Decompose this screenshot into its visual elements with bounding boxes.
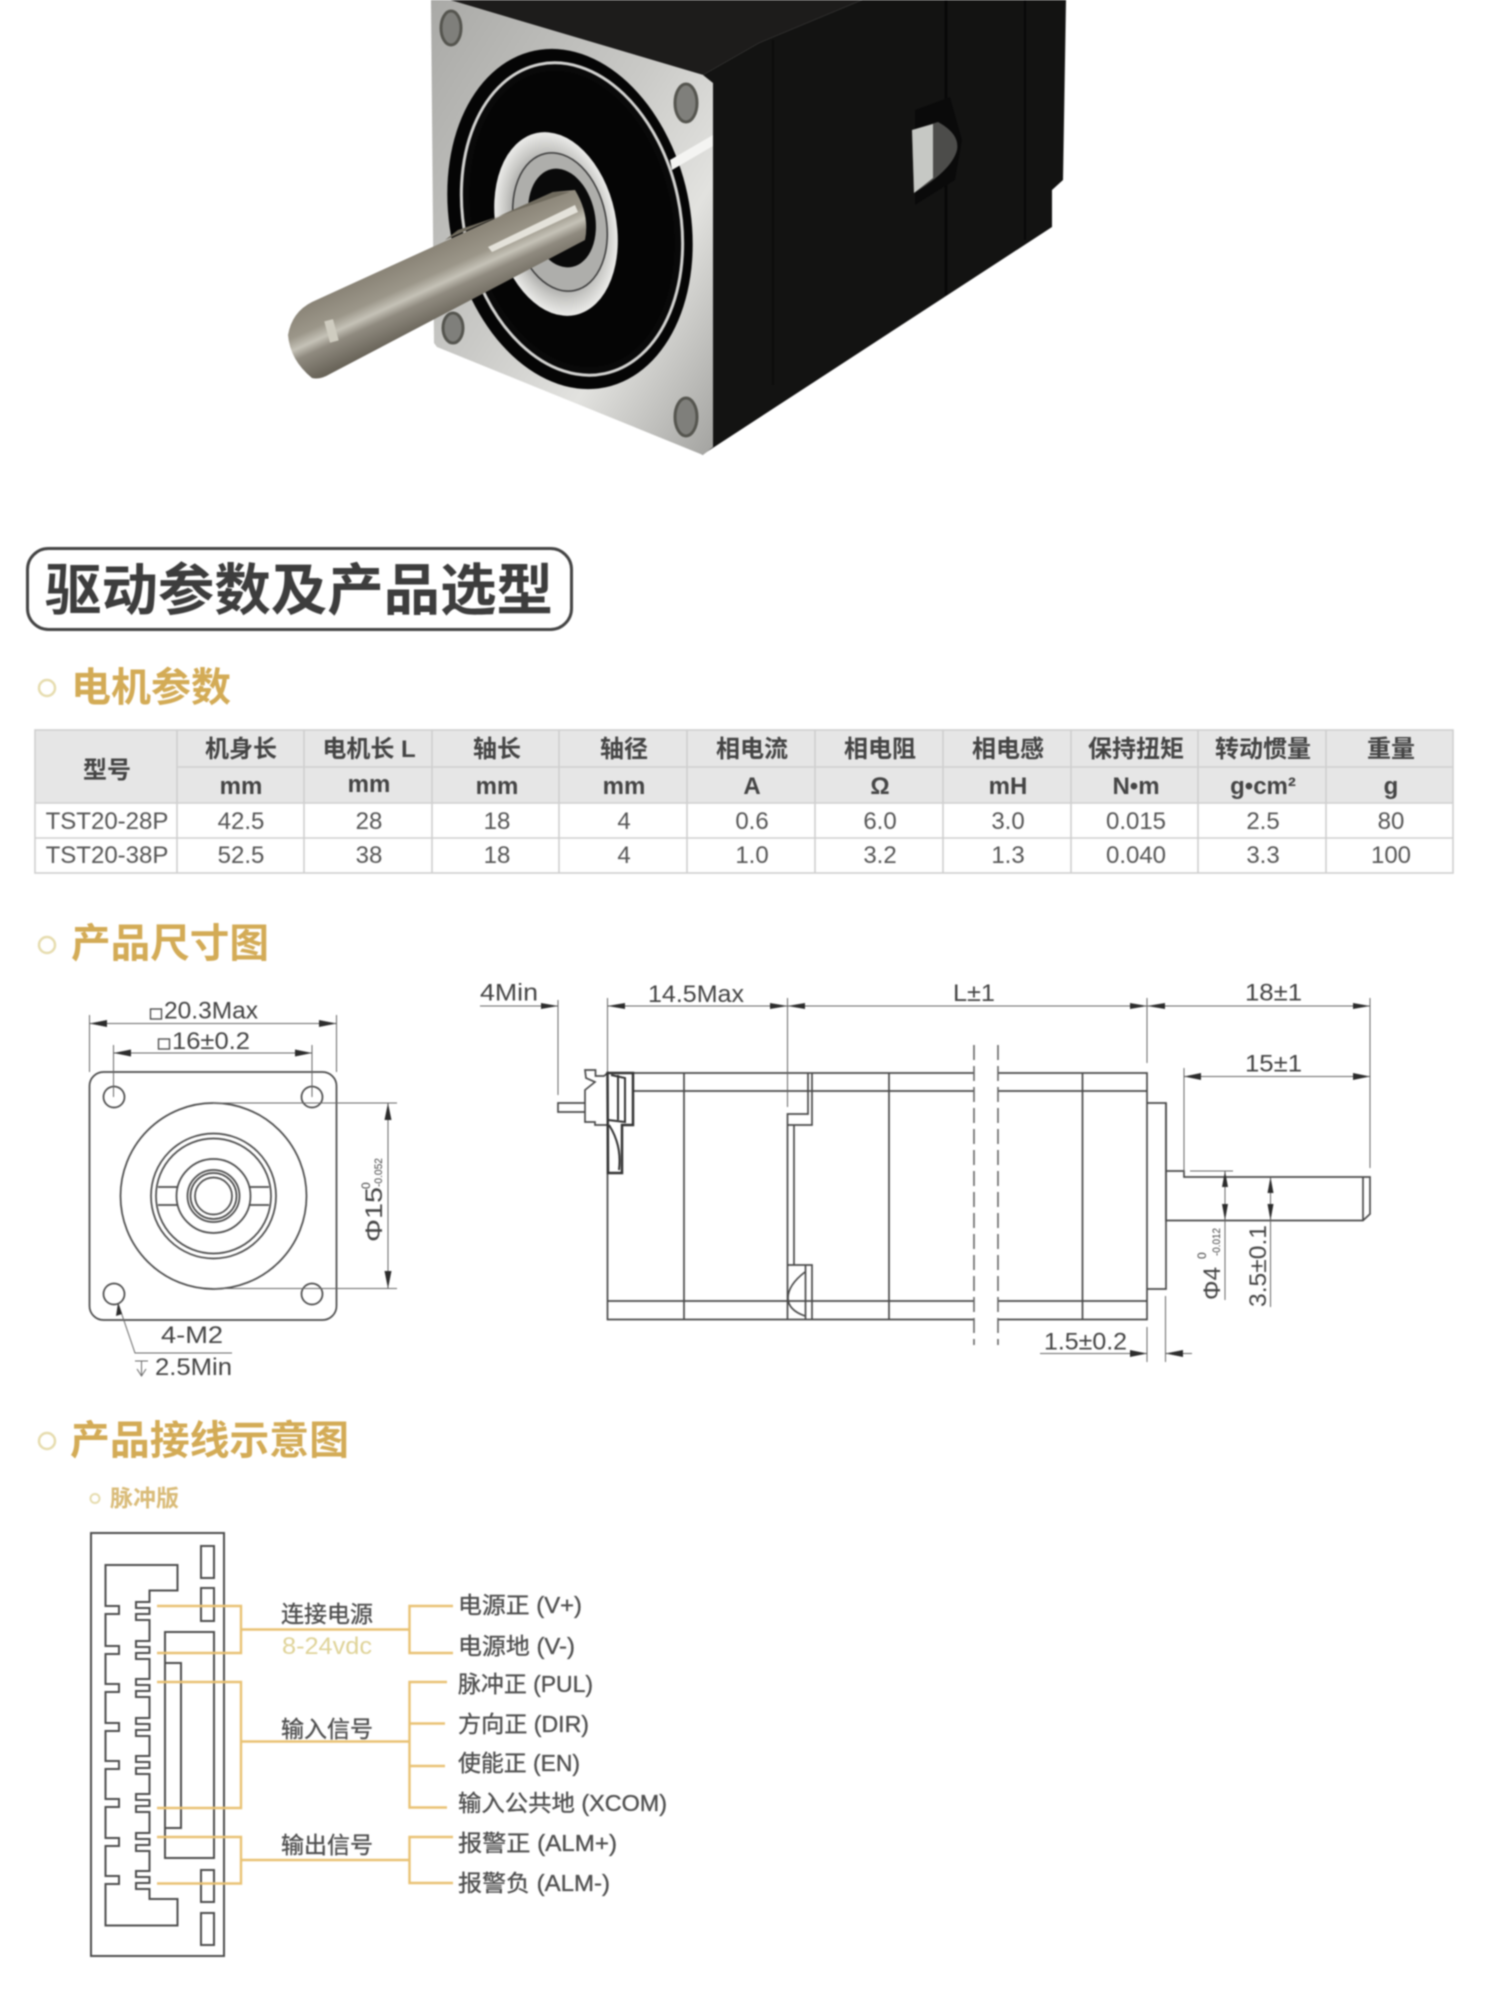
dimension: L±1: L±1 xyxy=(953,980,995,1007)
dimension: 14.5Max: 14.5Max xyxy=(648,981,744,1008)
pin labels: 方向正 (DIR) xyxy=(458,1711,589,1737)
dimension: 4Min xyxy=(480,980,558,1095)
side connector window xyxy=(912,97,962,205)
heading: 驱动参数及产品选型: 驱动参数及产品选型 xyxy=(45,559,553,622)
dimension: 20.3Max xyxy=(90,998,336,1072)
dimension: 4Min: 4Min xyxy=(480,980,538,1006)
table row: TST20-28P: 3.0 xyxy=(991,808,1025,835)
table row: TST20-28P: 6.0 xyxy=(863,808,897,835)
table row: TST20-28P: 28 xyxy=(356,808,382,835)
section heading: 电机参数: 电机参数 xyxy=(71,666,231,710)
dimension: 16±0.2 xyxy=(114,1028,312,1097)
dimension: L±1 xyxy=(788,980,1147,1009)
label group: 连接电源: 8-24vdc xyxy=(282,1633,372,1660)
drawing: side view xyxy=(480,980,1370,1362)
table header row: 保持扭矩 xyxy=(1088,736,1184,763)
table: motor parameters xyxy=(35,730,1453,873)
table header row: 相电阻 xyxy=(844,736,916,763)
table header row: 相电感 xyxy=(972,735,1044,763)
table header row: 相电流 xyxy=(716,736,788,763)
wiring leader lines xyxy=(157,1606,453,1884)
table header row: 电机长 L xyxy=(322,736,416,763)
dimension: 15±1 xyxy=(1184,1050,1370,1172)
section heading: 产品接线示意图: 产品接线示意图 xyxy=(70,1419,349,1463)
dimension: Φ4: -0.012 xyxy=(1211,1228,1223,1256)
callout: 4-M2: 2.5Min xyxy=(155,1354,232,1381)
label: 输入信号: 输入信号 xyxy=(281,1716,373,1742)
black face ring xyxy=(417,26,723,412)
dimension: Φ4: Φ4 xyxy=(1199,1267,1226,1300)
dimension: Φ4 xyxy=(1190,1171,1233,1300)
table header row: A xyxy=(743,773,761,800)
table row: TST20-28P: 80 xyxy=(1378,808,1404,835)
table row: TST20-28P: TST20-28P xyxy=(46,808,168,835)
dimension: 15±1: 15±1 xyxy=(1245,1050,1302,1078)
product photo: stepper motor xyxy=(288,0,1066,455)
table header row: 机身长 xyxy=(205,736,277,763)
callout: 4-M2 xyxy=(116,1303,232,1381)
table header row: 型号 xyxy=(83,757,131,784)
dimension: Φ15: -0.052 xyxy=(373,1158,385,1187)
table row: TST20-28P: 0.6 xyxy=(735,808,769,835)
table header row xyxy=(83,735,1415,800)
table header row: mm xyxy=(348,771,390,798)
rear connector xyxy=(558,1070,633,1173)
table header row: Ω xyxy=(870,773,890,800)
label: 输出信号: 输出信号 xyxy=(281,1832,373,1858)
table row: TST20-38P: 4 xyxy=(617,842,631,869)
table header row: mm xyxy=(603,773,645,800)
drawing: front view xyxy=(90,998,397,1381)
table header row: N•m xyxy=(1112,773,1160,800)
pin labels: 使能正 (EN) xyxy=(458,1750,580,1776)
table row: TST20-38P: 1.0 xyxy=(735,842,769,869)
hub bearing xyxy=(478,121,634,327)
label group: 连接电源: 连接电源 xyxy=(281,1601,373,1627)
table row: TST20-38P: 1.3 xyxy=(991,842,1025,869)
table row: TST20-38P: 3.2 xyxy=(863,842,897,869)
flange outline and circles xyxy=(90,1072,336,1320)
dimension: Φ15: 0 xyxy=(359,1182,373,1189)
section heading: 产品尺寸图: 产品尺寸图 xyxy=(71,922,269,966)
table row: TST20-28P: 2.5 xyxy=(1246,808,1280,835)
dimension: 18±1: 18±1 xyxy=(1245,980,1302,1006)
dimension: Φ4: 0 xyxy=(1195,1252,1209,1259)
motor top face xyxy=(450,0,862,75)
table header row: 轴长 xyxy=(473,736,521,763)
connector diagram xyxy=(91,1533,224,1956)
label group: 连接电源 xyxy=(281,1601,373,1660)
dimension: 20.3Max: 20.3Max xyxy=(164,998,258,1024)
table row: TST20-38P: 3.3 xyxy=(1246,842,1280,869)
table row: TST20-28P: 0.015 xyxy=(1106,808,1166,835)
pin labels: 输入公共地 (XCOM) xyxy=(458,1790,667,1816)
table row: TST20-38P: TST20-38P xyxy=(46,842,168,869)
table header row: mm xyxy=(220,773,262,800)
dimension: 1.5±0.2 xyxy=(1040,1296,1192,1362)
pin labels: 电源地 (V-) xyxy=(458,1633,575,1659)
table row: TST20-38P xyxy=(46,842,1411,869)
table row: TST20-28P xyxy=(46,808,1404,835)
dimension: 18±1 xyxy=(1147,980,1370,1168)
dimension: 16±0.2: 16±0.2 xyxy=(172,1028,250,1055)
dimension: 1.5±0.2: 1.5±0.2 xyxy=(1044,1328,1127,1356)
shaft xyxy=(288,190,586,378)
pin labels: 报警正 (ALM+) xyxy=(458,1830,617,1856)
table header row: 转动惯量 xyxy=(1215,736,1311,763)
sub heading: 脉冲版: 脉冲版 xyxy=(110,1485,179,1511)
mounting plate xyxy=(431,0,713,455)
pin labels: 脉冲正 (PUL) xyxy=(458,1671,593,1697)
table header row: 轴径 xyxy=(600,736,648,763)
table row: TST20-28P: 42.5 xyxy=(218,808,264,835)
table header row: g•cm² xyxy=(1230,773,1296,800)
table header row: mm xyxy=(476,773,518,800)
table header row: g xyxy=(1384,773,1398,800)
table row: TST20-38P: 38 xyxy=(356,842,382,869)
table row: TST20-38P: 0.040 xyxy=(1106,842,1166,869)
dimension: Φ15 xyxy=(213,1103,397,1288)
pin labels xyxy=(458,1592,667,1896)
table header row: 重量 xyxy=(1367,736,1415,763)
break lines xyxy=(974,1045,998,1345)
dimension: 14.5Max xyxy=(608,981,788,1107)
table row: TST20-28P: 4 xyxy=(617,808,631,835)
table row: TST20-38P: 52.5 xyxy=(218,842,264,869)
screw holes xyxy=(441,11,697,436)
pin labels: 报警负 (ALM-) xyxy=(458,1870,610,1896)
motor body side xyxy=(702,0,1066,455)
table row: TST20-38P: 100 xyxy=(1371,842,1411,869)
dimension: 3.5±0.1 xyxy=(1245,1177,1274,1307)
dimension: Φ15: Φ15 xyxy=(361,1187,388,1242)
pin labels: 电源正 (V+) xyxy=(458,1592,582,1618)
table row: TST20-28P: 18 xyxy=(484,808,510,835)
dimension: 3.5±0.1: 3.5±0.1 xyxy=(1245,1225,1272,1307)
callout: 4-M2: 4-M2 xyxy=(161,1322,223,1349)
motor body outline xyxy=(608,1073,1370,1320)
table header row: mH xyxy=(989,773,1027,800)
table row: TST20-38P: 18 xyxy=(484,842,510,869)
